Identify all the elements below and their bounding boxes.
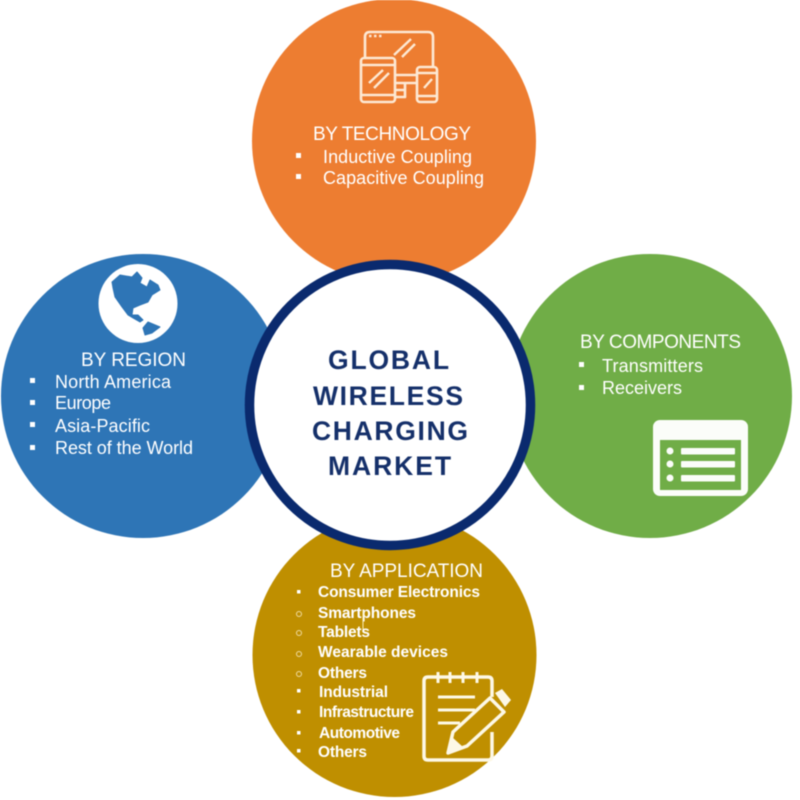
list: region items: Europe <box>55 393 111 413</box>
title: GLOBAL <box>328 345 449 375</box>
list: components items: Receivers <box>602 378 682 398</box>
panel: by components <box>508 254 792 538</box>
panel: center circle <box>250 264 530 546</box>
list: application items: Consumer Electronics <box>318 584 480 601</box>
list: region items <box>30 372 193 458</box>
title: MARKET <box>328 451 451 481</box>
list: application items <box>296 584 480 761</box>
list: application items: Industrial <box>319 684 388 701</box>
list: region items: Asia-Pacific <box>55 416 150 436</box>
list: region items: North America <box>55 372 172 392</box>
list: components items <box>579 356 703 398</box>
panel: by region <box>1 254 285 538</box>
list: application items: Tablets <box>318 624 370 641</box>
list: application items: Automotive <box>319 725 400 742</box>
list: application items: Wearable devices <box>318 644 448 661</box>
icon: notepad and pencil <box>424 672 511 760</box>
list: application items: Infrastructure <box>319 704 414 721</box>
title: WIRELESS <box>313 381 463 411</box>
list: technology items: Capacitive Coupling <box>323 168 484 188</box>
list: application items: Others <box>318 665 367 682</box>
title: CHARGING <box>312 416 468 446</box>
list: region items: Rest of the World <box>55 438 193 458</box>
list: application items: Smartphones <box>318 605 416 622</box>
list: application items: Others <box>318 744 367 761</box>
icon: globe <box>98 264 178 343</box>
list: technology items: Inductive Coupling <box>323 147 472 167</box>
icon: list window <box>653 420 748 496</box>
panel: by technology <box>252 0 536 283</box>
icon: devices <box>361 32 437 102</box>
heading: by region: BY REGION <box>81 350 186 371</box>
list: technology items <box>296 147 484 188</box>
title <box>312 345 468 481</box>
heading: by application: BY APPLICATION <box>330 561 483 582</box>
list: components items: Transmitters <box>602 356 703 376</box>
heading: by technology: BY TECHNOLOGY <box>313 124 471 145</box>
panel: by application <box>252 513 536 797</box>
heading: by components: BY COMPONENTS <box>580 332 741 353</box>
